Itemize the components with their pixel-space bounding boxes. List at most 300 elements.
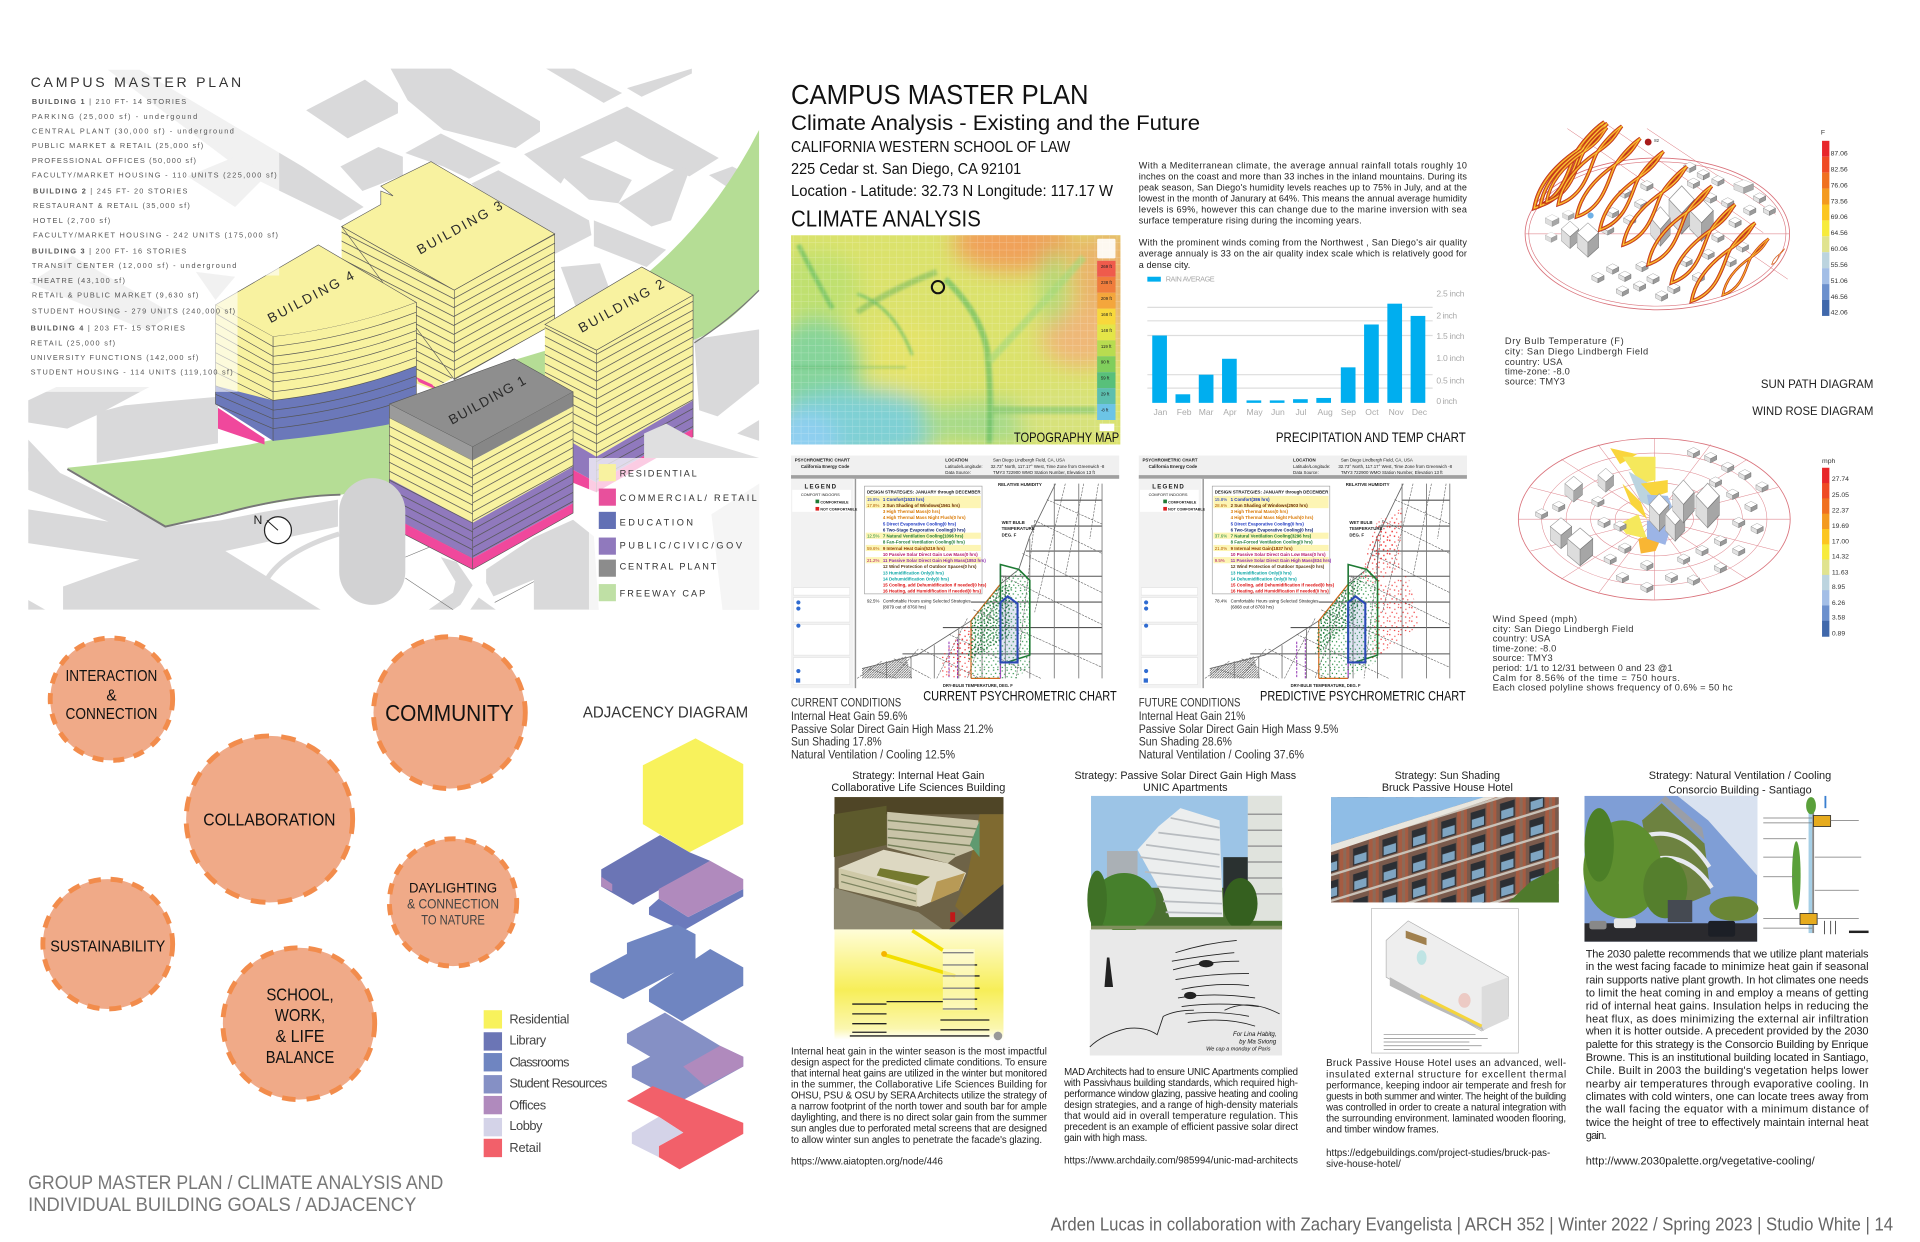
text block: natural ventilation: climates with cold winters, one can locate trees away from <box>1586 1091 1869 1103</box>
chart: current psychrometric chart: CURRENT PSYCHROMETRIC CHART <box>923 688 1117 703</box>
legend: dry bulb temperature scale: 64.56 <box>1831 230 1848 237</box>
goal circle: community <box>373 637 525 789</box>
text block: dry bulb data <box>1505 336 1648 386</box>
chart: predictive psychrometric chart: 28.6% <box>1215 503 1227 508</box>
text block: building program: BUILDING 3 | 200 FT- 16 STORIES <box>32 246 186 255</box>
chart: current psychrometric chart: DRY-BULB TEMPERATURE, DEG. F <box>943 683 1013 688</box>
bar chart: precipitation <box>1147 275 1466 445</box>
text block: climate description: a dense city. <box>1139 260 1190 270</box>
text block: sun shading: performance, keeping indoor air temperate and fresh for <box>1326 1081 1567 1092</box>
text block: internal heat gain: sun angles due to perforated metal screens that are designed <box>791 1123 1047 1134</box>
chart: current psychrometric chart: 3 High Thermal Mass(0 hrs) <box>883 509 941 514</box>
chart: current psychrometric chart: 10 Passive Solar Direct Gain Low Mass(0 hrs) <box>883 552 978 557</box>
panel: strategy natural ventilation: Strategy: Natural Ventilation / Cooling <box>1649 770 1831 782</box>
heading group: climate page title <box>791 79 1200 232</box>
text block: natural ventilation: The 2030 palette recommends that we utilize plant materials <box>1586 949 1869 961</box>
text block: wind speed data: Calm for 8.56% of the time = 750 hours. <box>1493 673 1680 683</box>
text block: dry bulb data: city: San Diego Lindbergh Field <box>1505 346 1648 356</box>
chart: predictive psychrometric chart: 13 Humidification Only(0 hrs) <box>1231 570 1292 575</box>
topo elevation legend: 269 ft <box>1101 264 1113 269</box>
legend: adjacency <box>484 1010 607 1157</box>
diagram: exploded axonometric <box>1371 909 1518 1053</box>
legend: adjacency: Offices <box>509 1097 546 1112</box>
chart: current psychrometric chart: 4 High Thermal Mass Night Flush(0 hrs) <box>883 515 966 520</box>
text block: building program: RETAIL (25,000 sf) <box>31 338 115 347</box>
chart: current psychrometric chart: 5 Direct Evaporative Cooling(0 hrs) <box>883 521 957 526</box>
chart: current psychrometric chart: San Diego Lindbergh Field, CA, USA <box>993 458 1065 463</box>
chart: current psychrometric chart: California Energy Code <box>801 464 850 469</box>
legend: dry bulb temperature scale: 42.06 <box>1831 310 1848 317</box>
legend: dry bulb temperature scale <box>1821 130 1848 317</box>
topo elevation legend: 29 ft <box>1101 392 1110 397</box>
legend: wind speed scale: 27.74 <box>1832 476 1849 483</box>
topo elevation legend: 90 ft <box>1101 360 1110 365</box>
text block: wind speed data: country: USA <box>1493 634 1551 644</box>
bar chart: precipitation: Dec <box>1412 407 1428 417</box>
panel: strategy natural ventilation <box>1583 770 1870 1167</box>
heading group: climate page title: CLIMATE ANALYSIS <box>791 206 981 232</box>
bar chart: precipitation: 2.5 inch <box>1436 288 1465 298</box>
chart: predictive psychrometric chart: Comfortable Hours using Selected Strategies <box>1231 598 1319 603</box>
text block: natural ventilation: the wall facing the equator with a minimum distance of <box>1586 1103 1870 1115</box>
label: sun path diagram: SUN PATH DIAGRAM <box>1761 377 1873 391</box>
chart: current psychrometric chart: 21.2% <box>867 558 879 563</box>
text block: climate description: surface temperature rising during the incoming years. <box>1139 215 1362 225</box>
chart: current psychrometric chart: 7 Natural Ventilation Cooling(1096 hrs) <box>883 534 964 539</box>
text block: future conditions: FUTURE CONDITIONS <box>1139 697 1241 710</box>
text block: internal heat gain: OHSU, PSU & OSU by SERA Architects utilize the strategy of <box>791 1090 1047 1101</box>
silo <box>339 478 405 605</box>
goal circle: daylighting: DAYLIGHTING <box>409 880 497 896</box>
bar chart: precipitation: Nov <box>1389 407 1405 417</box>
bar chart: precipitation: Sep <box>1341 407 1356 417</box>
goal circle: school work life balance <box>223 948 375 1100</box>
text block: future conditions: Sun Shading 28.6% <box>1139 736 1232 749</box>
text block: dry bulb data: country: USA <box>1505 357 1563 367</box>
text block: building program: PARKING (25,000 sf) - undergound <box>32 112 197 121</box>
text block: climate description: levels is 69%, however this can change due to the marine inversion with sea <box>1139 204 1468 214</box>
text block: natural ventilation: to limit the heat coming in and employ a means of getting <box>1586 988 1869 1000</box>
text block: sun shading: the surrounding environment. laminated wooden flooring, <box>1326 1114 1566 1125</box>
chart: predictive psychrometric chart: DRY-BULB TEMPERATURE, DEG. F <box>1291 683 1361 688</box>
chart: predictive psychrometric chart: COMFORTABLE <box>1168 500 1197 504</box>
goal circle: school work life balance: & LIFE <box>276 1026 324 1046</box>
bar chart: precipitation: Apr <box>1223 407 1237 417</box>
chart: predictive psychrometric chart: California Energy Code <box>1149 464 1198 469</box>
text backing panel <box>28 67 279 392</box>
text block: building program: FACULTY/MARKET HOUSING - 110 UNITS (225,000 sf) <box>32 171 277 180</box>
legend: wind speed scale: 17.00 <box>1832 539 1849 546</box>
panel: strategy natural ventilation: Consorcio Building - Santiago <box>1668 784 1812 796</box>
north arrow: N <box>253 513 262 527</box>
chart: current psychrometric chart: DESIGN STRATEGIES: JANUARY through DECEMBER <box>867 489 981 494</box>
text block: building program: RESTAURANT & RETAIL (35,000 sf) <box>33 201 190 210</box>
chart: predictive psychrometric chart <box>1139 456 1467 703</box>
chart: predictive psychrometric chart: DESIGN STRATEGIES: JANUARY through DECEMBER <box>1215 489 1329 494</box>
text block: climate description: With a Mediterranean climate, the average annual rainfall totals roughly 10 <box>1139 160 1467 170</box>
legend: master plan program: COMMERCIAL/ RETAIL <box>620 493 757 503</box>
text block: climate description: lowest in the month of Janurary at 64%. This means the annual average humidity <box>1139 193 1467 203</box>
topo elevation legend: 148 ft <box>1101 328 1113 333</box>
panel: strategy sun shading: Bruck Passive House Hotel <box>1382 782 1513 794</box>
caption: group master plan: INDIVIDUAL BUILDING GOALS / ADJACENCY <box>28 1195 417 1216</box>
chart: predictive psychrometric chart: 14 Dehumidification Only(0 hrs) <box>1231 576 1297 581</box>
text block: natural ventilation <box>1585 949 1870 1167</box>
text block: passive solar <box>1063 1067 1298 1166</box>
text block: building program: STUDENT HOUSING - 279 UNITS (240,000 sf) <box>32 306 235 315</box>
chart: predictive psychrometric chart: 8 Fan-Forced Ventilation Cooling(0 hrs) <box>1231 540 1313 545</box>
chart: current psychrometric chart: 11 Passive Solar Direct Gain High Mass(1853 hrs) <box>883 558 986 563</box>
text block: natural ventilation: heat flux, as does minimizing the external air infiltration <box>1586 1013 1869 1025</box>
text block: climate description: With the prominent winds coming from the Northwest , San Diego's air quality <box>1139 238 1467 248</box>
chart: predictive psychrometric chart: COMFORT INDOORS <box>1149 492 1188 497</box>
building 3: BUILDING 3 <box>414 198 505 257</box>
chart: current psychrometric chart: 8 Fan-Forced Ventilation Cooling(0 hrs) <box>883 540 965 545</box>
chart: current psychrometric chart: 12.5% <box>867 534 879 539</box>
panel: strategy passive solar <box>1063 770 1298 1166</box>
chart: current psychrometric chart: 17.8% <box>867 503 879 508</box>
chart: predictive psychrometric chart: 3 High Thermal Mass(0 hrs) <box>1231 509 1288 514</box>
legend: wind speed scale: 6.26 <box>1832 600 1845 607</box>
goal circle: school work life balance: BALANCE <box>266 1047 334 1067</box>
chart: predictive psychrometric chart: 16 Heating, add Humidification if needed(0 hrs) <box>1231 589 1329 594</box>
photo: aerial of building <box>834 797 1003 929</box>
panel: strategy sun shading: Strategy: Sun Shading <box>1395 770 1500 782</box>
diagram: section with solar gain <box>834 929 1003 1040</box>
text block: current conditions: CURRENT CONDITIONS <box>791 697 901 710</box>
chart: current psychrometric chart: 13 Humidification Only(0 hrs) <box>883 570 944 575</box>
text block: building program: PUBLIC MARKET & RETAIL (25,000 sf) <box>32 141 203 150</box>
goal circle: collaboration: COLLABORATION <box>203 809 336 829</box>
chart: predictive psychrometric chart: 4 High Thermal Mass Night Flush(0 hrs) <box>1231 515 1314 520</box>
text block: internal heat gain: to allow winter sun angles to penetrate the facade's glazing. <box>791 1135 1042 1146</box>
goal circle: school work life balance: SCHOOL, <box>266 984 334 1004</box>
panel: strategy internal heat gain: Collaborative Life Sciences Building <box>831 782 1005 794</box>
building 1 <box>389 359 573 569</box>
text block: passive solar: that would aid in overall temperature regulation. This <box>1064 1111 1298 1122</box>
text block: sun shading: guests in both summer and winter. The height of the building <box>1326 1092 1566 1103</box>
bar chart: precipitation: 2 inch <box>1436 310 1457 320</box>
bar chart: precipitation: 0.5 inch <box>1436 375 1465 385</box>
text block: building program: HOTEL (2,700 sf) <box>33 216 110 225</box>
chart: current psychrometric chart: 32.73° North, 117.17° West, Time Zone from Greenwich -8 <box>991 464 1105 469</box>
chart: predictive psychrometric chart: 37.6% <box>1215 534 1227 539</box>
text block: climate description <box>1139 160 1468 270</box>
legend: wind speed scale: 22.37 <box>1832 507 1849 514</box>
bar chart: precipitation: 0 inch <box>1436 396 1457 406</box>
heading: adjacency diagram: ADJACENCY DIAGRAM <box>583 705 748 722</box>
text block: wind speed data: period: 1/1 to 12/31 between 0 and 23 @1 <box>1493 663 1673 673</box>
chart: current psychrometric chart: 9 Internal Heat Gain(5219 hrs) <box>883 546 945 551</box>
legend: adjacency: Residential <box>509 1012 569 1027</box>
heading group: climate page title: 225 Cedar st. San Diego, CA 92101 <box>791 161 1021 178</box>
topo elevation legend: 168 ft <box>1101 312 1113 317</box>
building 4: BUILDING 4 <box>265 268 357 326</box>
bar chart: precipitation: Jul <box>1296 407 1307 417</box>
legend: wind speed scale: 11.63 <box>1832 569 1849 576</box>
legend: dry bulb temperature scale: 51.06 <box>1831 278 1848 285</box>
panel: strategy passive solar: Strategy: Passive Solar Direct Gain High Mass <box>1074 770 1296 782</box>
legend: dry bulb temperature scale: 76.06 <box>1831 182 1848 189</box>
text block: current conditions: Natural Ventilation / Cooling 12.5% <box>791 749 956 762</box>
legend: adjacency: Student Resources <box>509 1075 607 1090</box>
bar chart: precipitation: RAIN AVERAGE <box>1166 275 1215 284</box>
panel: strategy internal heat gain <box>791 770 1048 1167</box>
image: concept sketch: by Ma Sviong <box>1239 1038 1277 1045</box>
chart: current psychrometric chart: COMFORTABLE <box>820 500 849 504</box>
chart: current psychrometric chart: 14 Dehumidification Only(0 hrs) <box>883 576 950 581</box>
chart: current psychrometric chart <box>791 456 1119 703</box>
caption: group master plan: GROUP MASTER PLAN / CLIMATE ANALYSIS AND <box>28 1173 443 1194</box>
chart: current psychrometric chart: TMY3 722900 WMO Station Number, Elevation 13 ft <box>993 470 1096 475</box>
freeway cap <box>67 130 759 527</box>
chart: current psychrometric chart: (8079 out of 8760 hrs) <box>883 605 927 610</box>
topo elevation legend <box>1097 261 1116 431</box>
text block: building program: BUILDING 4 | 203 FT- 15 STORIES <box>31 324 185 333</box>
legend: master plan program: FREEWAY CAP <box>620 588 705 598</box>
chart: current psychrometric chart: WET BULB <box>1002 520 1025 525</box>
north arrow <box>253 513 291 544</box>
bar chart: precipitation: Feb <box>1177 407 1192 417</box>
chart: predictive psychrometric chart: San Diego Lindbergh Field, CA, USA <box>1341 458 1413 463</box>
goal circle: collaboration <box>186 736 353 902</box>
bar chart: precipitation: 1.0 inch <box>1436 353 1465 363</box>
chart: predictive psychrometric chart: 10 Passive Solar Direct Gain Low Mass(0 hrs) <box>1231 552 1326 557</box>
legend: wind speed scale: 19.69 <box>1832 523 1849 530</box>
text block: current conditions: Passive Solar Direct Gain High Mass 21.2% <box>791 723 994 736</box>
image: concept sketch: We cap a monday of Paris <box>1206 1047 1271 1053</box>
text block: internal heat gain: daylighting, and there is no direct solar gain from the summer <box>791 1112 1048 1123</box>
legend: master plan program: CENTRAL PLANT <box>620 561 717 571</box>
legend: adjacency: Classrooms <box>509 1055 569 1070</box>
image: concept sketch: For Lina Habitg, <box>1233 1031 1277 1038</box>
text block: internal heat gain: that internal heat gains are utilized in the winter but monitored <box>791 1068 1047 1079</box>
chart: current psychrometric chart: 15 Cooling, add Dehumidification if needed(0 hrs) <box>883 583 987 588</box>
chart: predictive psychrometric chart: 2 Sun Shading of Windows(2503 hrs) <box>1231 503 1308 508</box>
chart: predictive psychrometric chart: TEMPERATURE <box>1349 526 1383 531</box>
text block: building program: BUILDING 2 | 245 FT- 20 STORIES <box>33 186 187 195</box>
text block: internal heat gain <box>791 1046 1048 1167</box>
building 3 <box>342 162 555 389</box>
caption: group master plan <box>28 1173 443 1216</box>
goal circle: interaction and connection: INTERACTION <box>66 668 157 685</box>
title: campus master plan (left): CAMPUS MASTER PLAN <box>31 74 241 90</box>
bar chart: precipitation: Mar <box>1199 407 1214 417</box>
text block: sun shading: Bruck Passive House Hotel uses an advanced, well- <box>1326 1058 1566 1069</box>
chart: current psychrometric chart: DEG. F <box>1002 532 1017 537</box>
text block: building program: THEATRE (43,100 sf) <box>32 276 125 285</box>
text block: climate description: peak season, San Diego's humidity levels reaches up to 75% in July, and at the <box>1139 182 1467 192</box>
text block: natural ventilation: Browne. This is an institutional building located in Santiago, <box>1586 1052 1869 1064</box>
legend: dry bulb temperature scale: 69.06 <box>1831 214 1848 221</box>
chart: predictive psychrometric chart: LOCATION <box>1293 458 1316 463</box>
chart: predictive psychrometric chart: WET BULB <box>1349 520 1373 525</box>
text block: future conditions <box>1139 697 1339 762</box>
chart: predictive psychrometric chart: (6868 out of 8760 hrs) <box>1231 605 1274 610</box>
text block: building program: CENTRAL PLANT (30,000 sf) - underground <box>32 126 234 135</box>
text block: wind speed data: city: San Diego Lindbergh Field <box>1493 624 1633 634</box>
text block: natural ventilation: rain supports native plant growth. In hot climates one needs <box>1586 974 1869 986</box>
chart: predictive psychrometric chart: 32.73° North, 117.17° West, Time Zone from Greenwich -8 <box>1338 464 1453 469</box>
chart: predictive psychrometric chart: 12 Wind Protection of Outdoor Spaces(0 hrs) <box>1231 564 1325 569</box>
text block: natural ventilation: palette for this strategy is the Consorcio Building by Enrique <box>1586 1039 1869 1051</box>
goal circle: daylighting <box>389 839 517 966</box>
panel: campus master plan axonometric <box>28 67 759 610</box>
diagram: sun path: 82 <box>1654 138 1660 143</box>
legend: master plan program: RESIDENTIAL <box>620 468 697 478</box>
chart: predictive psychrometric chart: Latitude/Longitude: <box>1293 464 1330 469</box>
text block: sun shading: was controlled in order to create a natural integration with <box>1325 1103 1566 1114</box>
chart: current psychrometric chart: NOT COMFORTABLE <box>820 508 858 512</box>
photo: consorcio building <box>1583 796 1758 942</box>
text block: wind speed data <box>1493 614 1733 693</box>
chart: predictive psychrometric chart: NOT COMFORTABLE <box>1168 508 1206 512</box>
text block: current conditions <box>791 697 994 762</box>
text block: future conditions: Passive Solar Direct Gain High Mass 9.5% <box>1139 723 1339 736</box>
bar chart: precipitation: Aug <box>1318 407 1333 417</box>
chart: current psychrometric chart: LOCATION <box>945 458 968 463</box>
topo elevation legend: -8 ft <box>1101 407 1109 412</box>
legend: adjacency: Library <box>509 1032 547 1047</box>
chart: current psychrometric chart: Latitude/Longitude: <box>945 464 983 469</box>
chart: current psychrometric chart: RELATIVE HUMIDITY <box>998 482 1042 487</box>
diagram: vegetated wall section <box>1763 796 1869 934</box>
text block: wind speed data: Each closed polyline shows frequency of 0.6% = 50 hc <box>1493 683 1733 693</box>
legend: adjacency: Lobby <box>509 1118 543 1133</box>
text block: natural ventilation: rid of internal heat gains. Insulation helps in reducing the <box>1586 1001 1869 1013</box>
chart: predictive psychrometric chart: LEGEND <box>1152 484 1185 491</box>
text block: internal heat gain: https://www.aiatopten.org/node/446 <box>791 1156 943 1167</box>
topo elevation legend: 238 ft <box>1101 280 1113 285</box>
goal circle: interaction and connection: & <box>106 687 117 704</box>
text block: wind speed data: time-zone: -8.0 <box>1493 643 1556 653</box>
text block: wind speed data: source: TMY3 <box>1493 653 1553 663</box>
bar chart: precipitation: Jun <box>1271 407 1285 417</box>
topo elevation legend: 209 ft <box>1101 296 1113 301</box>
text block: dry bulb data: source: TMY3 <box>1505 376 1565 386</box>
chart: current psychrometric chart: 12 Wind Protection of Outdoor Spaces(0 hrs) <box>883 564 977 569</box>
chart: current psychrometric chart: 59.6% <box>867 546 879 551</box>
panel: strategy passive solar: UNIC Apartments <box>1143 782 1228 794</box>
text block: natural ventilation: when it is hotter outside. A precedent provided by the 2030 <box>1585 1026 1869 1038</box>
text block: passive solar: performance window glazing, passive heating and cooling <box>1064 1089 1298 1100</box>
text block: sun shading <box>1325 1058 1567 1170</box>
text block: passive solar: with Passivhaus building standards, which required high- <box>1063 1078 1298 1089</box>
chart: current psychrometric chart: 6 Two-Stage Evaporative Cooling(0 hrs) <box>883 527 966 532</box>
chart: predictive psychrometric chart: 7 Natural Ventilation Cooling(3296 hrs) <box>1231 534 1312 539</box>
chart: predictive psychrometric chart: DEG. F <box>1349 532 1364 537</box>
diagram: sun path <box>1525 122 1790 310</box>
topo elevation legend: 119 ft <box>1101 344 1112 349</box>
chart: predictive psychrometric chart: 5 Direct Evaporative Cooling(0 hrs) <box>1231 521 1304 526</box>
legend: master plan program: PUBLIC/CIVIC/GOV <box>620 541 743 551</box>
chart: current psychrometric chart: COMFORT INDOORS <box>801 492 840 497</box>
text block: sun shading: sive-house-hotel/ <box>1326 1159 1401 1170</box>
chart: predictive psychrometric chart: 15 Cooling, add Dehumidification if needed(0 hrs) <box>1231 583 1335 588</box>
text block: building program: UNIVERSITY FUNCTIONS (142,000 sf) <box>31 353 198 362</box>
chart: predictive psychrometric chart: PREDICTIVE PSYCHROMETRIC CHART <box>1260 688 1466 703</box>
text block: sun shading: insulated external structure for excellent thermal <box>1326 1070 1566 1081</box>
text block: dry bulb data: Dry Bulb Temperature (F) <box>1505 336 1624 346</box>
text block: current conditions: Internal Heat Gain 59.6% <box>791 710 908 723</box>
photo: UNIC apartments <box>1087 796 1282 932</box>
chart: current psychrometric chart: TEMPERATURE <box>1002 526 1035 531</box>
chart: predictive psychrometric chart: 6 Two-Stage Evaporative Cooling(0 hrs) <box>1231 527 1314 532</box>
goal circle: sustainability: SUSTAINABILITY <box>50 938 166 955</box>
text block: climate description: average annualy is 33 on the air quality index scale which is relatively good for <box>1139 249 1467 259</box>
text block: building program: BUILDING 1 | 210 FT- 14 STORIES <box>32 97 186 106</box>
legend: wind speed scale: 0.89 <box>1832 631 1845 638</box>
legend: dry bulb temperature scale: 87.06 <box>1831 151 1848 158</box>
panel: strategy sun shading <box>1325 770 1567 1170</box>
legend backing panel <box>589 458 759 610</box>
chart: predictive psychrometric chart: 11 Passive Solar Direct Gain High Mass(834 hrs) <box>1231 558 1332 563</box>
chart: predictive psychrometric chart: 1 Comfort(386 hrs) <box>1231 497 1270 502</box>
building 2: BUILDING 2 <box>576 276 667 336</box>
chart: current psychrometric chart: 2 Sun Shading of Windows(1561 hrs) <box>883 503 960 508</box>
legend: wind speed scale <box>1822 458 1849 638</box>
text block: natural ventilation: Chile. Built in 2003 the building's vegetation helps lower <box>1586 1065 1869 1077</box>
heading group: climate page title: Climate Analysis - Existing and the Future <box>791 111 1200 135</box>
text block: building program: FACULTY/MARKET HOUSING - 242 UNITS (175,000 sf) <box>33 231 278 240</box>
chart: predictive psychrometric chart: 9.5% <box>1215 558 1225 563</box>
text block: internal heat gain: design aspect for the predicted climate conditions. To ensure <box>791 1057 1047 1068</box>
text block: natural ventilation: http://www.2030palette.org/vegetative-cooling/ <box>1586 1155 1816 1167</box>
text block: sun shading: and timber window frames. <box>1326 1125 1439 1136</box>
goal circle: sustainability <box>43 879 173 1009</box>
chart: predictive psychrometric chart: 9 Internal Heat Gain(1837 hrs) <box>1231 546 1293 551</box>
text block: future conditions: Natural Ventilation / Cooling 37.6% <box>1139 749 1305 762</box>
bar chart: precipitation: May <box>1247 407 1263 417</box>
text block: building program: PROFESSIONAL OFFICES (50,000 sf) <box>32 156 196 165</box>
goal circle: school work life balance: WORK, <box>275 1005 325 1025</box>
text block: wind speed data: Wind Speed (mph) <box>1493 614 1577 624</box>
goal circle: daylighting: TO NATURE <box>421 911 485 927</box>
chart: current psychrometric chart: 16 Heating, add Humidification if needed(0 hrs) <box>883 589 981 594</box>
legend: dry bulb temperature scale: 55.56 <box>1831 262 1848 269</box>
legend: master plan program <box>599 464 757 601</box>
chart: predictive psychrometric chart: TMY3 722900 WMO Station Number, Elevation 13 ft <box>1341 470 1443 475</box>
text block: building program <box>31 97 278 377</box>
chart: predictive psychrometric chart: Data Source: <box>1293 470 1319 475</box>
bar chart: precipitation: PRECIPITATION AND TEMP CHART <box>1276 430 1466 445</box>
text block: building program: STUDENT HOUSING - 114 UNITS (119,100 sf) <box>31 368 233 377</box>
legend: wind speed scale: 14.32 <box>1832 553 1849 560</box>
text block: passive solar: precedent is an example of efficient passive solar direct <box>1064 1122 1298 1133</box>
text block: passive solar: https://www.archdaily.com/985994/unic-mad-architects <box>1064 1155 1298 1166</box>
legend: master plan program: EDUCATION <box>620 517 693 527</box>
text block: passive solar: gain with high mass. <box>1064 1133 1147 1144</box>
bar chart: precipitation: Jan <box>1153 407 1168 417</box>
chart: predictive psychrometric chart: 15.8% <box>1215 497 1227 502</box>
legend: dry bulb temperature scale: 82.56 <box>1831 166 1848 173</box>
text block: internal heat gain: in the summer, the Collaborative Life Sciences Building for <box>791 1079 1048 1090</box>
heading group: climate page title: CALIFORNIA WESTERN SCHOOL OF LAW <box>791 139 1070 156</box>
bar chart: precipitation: 1.5 inch <box>1436 331 1465 341</box>
chart: current psychrometric chart: PSYCHROMETRIC CHART <box>795 458 850 463</box>
chart: current psychrometric chart: 92.5% <box>867 598 879 603</box>
chart: predictive psychrometric chart: PSYCHROMETRIC CHART <box>1142 458 1198 463</box>
building 2 <box>545 267 693 492</box>
legend: dry bulb temperature scale: 73.56 <box>1831 198 1848 205</box>
text block: passive solar: design strategies, and a range of high-density materials <box>1064 1100 1298 1111</box>
legend: dry bulb temperature scale: F <box>1821 130 1825 137</box>
diagram: adjacency stack <box>590 738 743 1169</box>
chart: current psychrometric chart: 1 Comfort(1533 hrs) <box>883 497 925 502</box>
goal circle: interaction and connection: CONNECTION <box>66 706 157 723</box>
goal circle: community: COMMUNITY <box>385 700 514 726</box>
photo: bruck facade <box>1331 797 1559 902</box>
